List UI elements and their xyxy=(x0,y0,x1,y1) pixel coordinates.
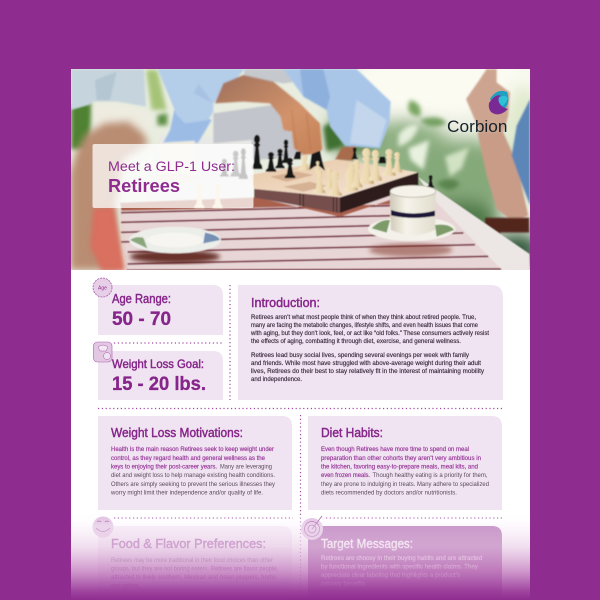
icon: logo mark xyxy=(489,91,508,114)
panel: weight loss motivations xyxy=(98,416,292,510)
table xyxy=(120,191,529,271)
text: age range value: 50 - 70 xyxy=(112,309,171,330)
icon: target xyxy=(301,516,323,540)
heading: weight loss motivations: Weight Loss Motivations: xyxy=(111,425,243,440)
text: target messages body: appreciate clear labeling that highlights a product’s xyxy=(321,572,460,579)
icon: scale xyxy=(94,342,112,362)
panel: diet habits xyxy=(308,416,502,510)
icon: age badge: Age xyxy=(98,286,107,292)
Corbion logo xyxy=(447,91,508,136)
heading: food and flavor preferences: Food & Flavor Preferences: xyxy=(111,536,266,551)
text: introduction body: Retirees lead busy social lives, spending several evenings per week with family xyxy=(251,352,470,359)
Corbion logo: Corbion xyxy=(447,117,508,136)
text: introduction body: and friends. While most have struggled with above-average weight during their adult xyxy=(251,360,481,367)
text: introduction body: Retirees aren’t what most people think of when they think about retired people. True, xyxy=(251,314,476,321)
text: diet habits body: Though healthy eating is a priority for them, xyxy=(372,472,488,479)
hero photo: chess game on a patio table xyxy=(71,69,530,270)
text: motivations body: control, as they regard health and general wellness as the xyxy=(111,455,265,462)
title: audience: Retirees xyxy=(108,176,180,196)
text: motivations body: Many are leveraging xyxy=(220,464,272,470)
text: weight goal label: Weight Loss Goal: xyxy=(112,357,204,371)
text: introduction body xyxy=(250,314,489,383)
text: target messages body: Retirees are choosy in their buying habits and are attracted xyxy=(321,555,482,562)
saucer left xyxy=(130,250,220,263)
text: diet habits body: preparation than other cohorts they aren’t very ambitious in xyxy=(321,455,481,462)
text: diet habits body: even frozen meals. xyxy=(321,472,370,479)
text: diet habits body: the kitchen, favoring easy-to-prepare meals, meal kits, and xyxy=(321,464,478,470)
heading: target messages: Target Messages: xyxy=(321,536,413,551)
heading: diet habits: Diet Habits: xyxy=(321,425,383,440)
text: diet habits body: diets recommended by doctors and/or nutritionists. xyxy=(321,490,457,496)
text: food and flavor body: groups, but they are not boring eaters. xyxy=(111,566,209,572)
panel: introduction xyxy=(238,285,503,400)
bottom fade overlay xyxy=(71,510,530,600)
text: food and flavor body: Retirees are flavor people, xyxy=(211,566,278,572)
text: food and flavor body: attracted to lively southern, Mexican and Asian peppers, herbs xyxy=(111,574,276,581)
text: motivations body: diet and weight loss to help manage existing health conditions. xyxy=(111,472,275,479)
text: food and flavor body: and spices. xyxy=(111,582,140,590)
text: motivations body: keys to enjoying their post-career years. xyxy=(111,464,217,470)
text: age range label: Age Range: xyxy=(112,292,171,306)
text: motivations body xyxy=(110,446,276,496)
blurred foreground hand and cup xyxy=(70,104,200,271)
text: introduction body: and independence. xyxy=(251,376,302,383)
panel: weight loss goal xyxy=(94,342,223,400)
text: target messages body: by functional ingredients with specific health claims. They xyxy=(321,564,479,570)
text: diet habits body: they are prone to indulging in treats. Many adhere to specialized xyxy=(321,481,489,488)
black pieces xyxy=(252,135,434,188)
white sheet xyxy=(71,69,530,600)
title card xyxy=(92,144,254,208)
chess board xyxy=(254,172,418,213)
white pieces xyxy=(298,148,402,196)
text: introduction body: with aging, but they don’t look, feel, or act like “old folks.” These consumers actively resist xyxy=(250,330,489,337)
panel: food and flavor preferences xyxy=(92,516,292,600)
coffee cup right xyxy=(369,243,452,257)
icon: smiling face xyxy=(92,516,114,538)
text: introduction body: the effects of aging, combatting it through diet, exercise, and general wellness. xyxy=(251,338,461,345)
text: motivations body: worry might limit their independence and/or quality of life. xyxy=(110,490,263,496)
text: motivations body: Others are simply seeking to prevent the serious illnesses they xyxy=(111,481,276,488)
text: target messages body xyxy=(321,555,482,588)
panel: target messages xyxy=(301,516,502,600)
heading: introduction: Introduction: xyxy=(251,295,320,310)
text: introduction body: lives, Retirees do their best to stay relatively fit in the interest of maintaining mobility xyxy=(251,368,485,375)
text: food and flavor body: Retirees may be more traditional in their food choices than other xyxy=(111,557,273,564)
text: introduction body: many are facing the metabolic changes, lifestyle shifts, and even health issues that come xyxy=(251,322,478,329)
text: diet habits body xyxy=(321,446,489,496)
text: weight goal value: 15 - 20 lbs. xyxy=(112,374,206,395)
ghost pieces behind the card xyxy=(194,148,248,208)
text: motivations body: Health is the main reason Retirees seek to keep weight under xyxy=(111,446,274,453)
text: food and flavor body xyxy=(111,557,278,590)
text: diet habits body: Even though Retirees have more time to spend on meal xyxy=(321,446,469,453)
text: target messages body: primary benefits. xyxy=(321,580,367,588)
title: eyebrow: Meet a GLP-1 User: xyxy=(108,158,235,174)
panel: age range xyxy=(93,278,223,335)
